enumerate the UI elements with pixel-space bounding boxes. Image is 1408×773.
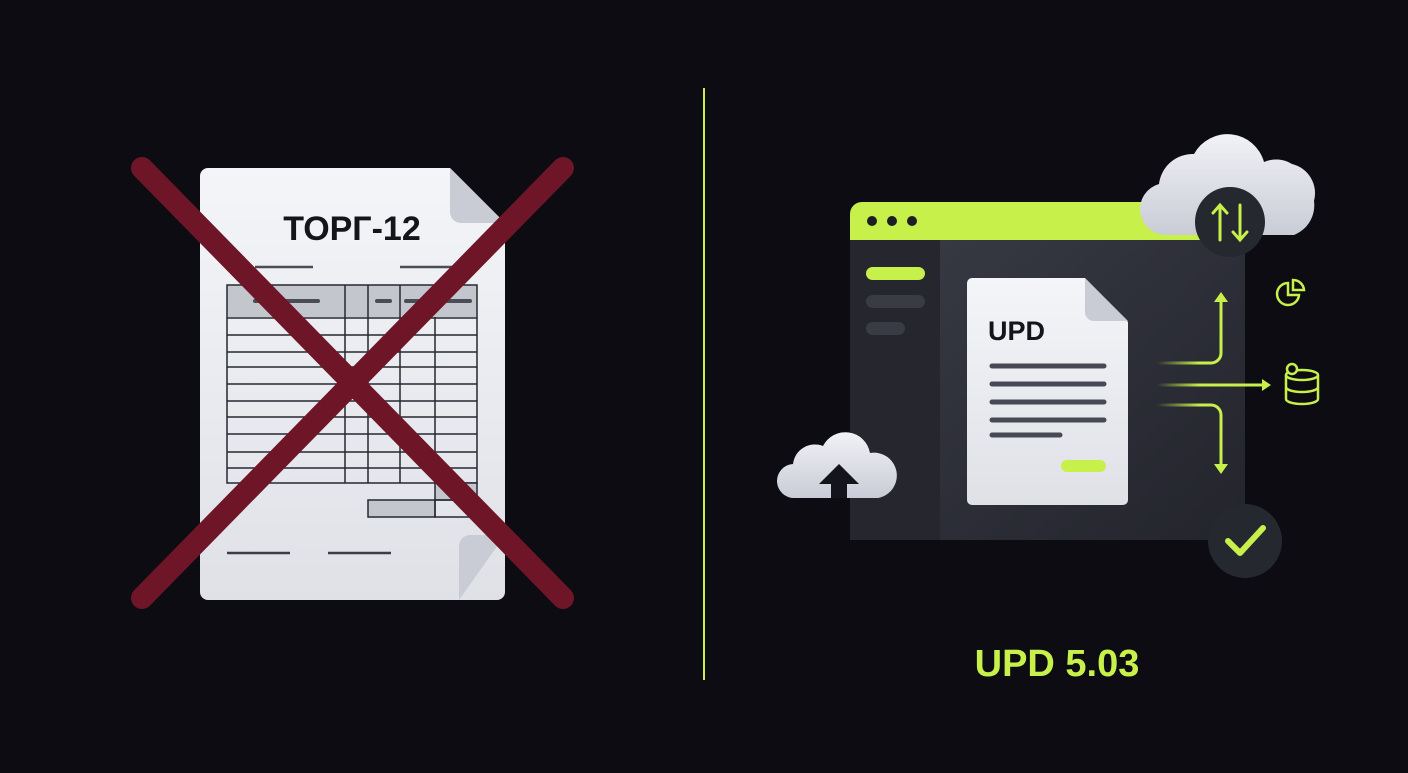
icon: cloud upload	[777, 432, 897, 498]
icon: check circle	[1208, 504, 1282, 578]
heading: ТОРГ-12: ТОРГ-12	[283, 210, 421, 248]
document: UPD	[967, 278, 1128, 505]
document: UPD: UPD	[988, 316, 1045, 346]
icon: pie chart	[1277, 280, 1304, 305]
icon: database	[1286, 364, 1318, 404]
panel: app window	[850, 202, 1271, 540]
panel: old document TORG-12	[200, 168, 505, 600]
arrows: data flow	[1157, 300, 1262, 466]
icon: cloud sync	[1140, 134, 1315, 257]
divider	[703, 88, 705, 680]
red cross	[142, 168, 563, 598]
table	[227, 285, 477, 517]
label: UPD 5.03: UPD 5.03	[975, 643, 1139, 685]
